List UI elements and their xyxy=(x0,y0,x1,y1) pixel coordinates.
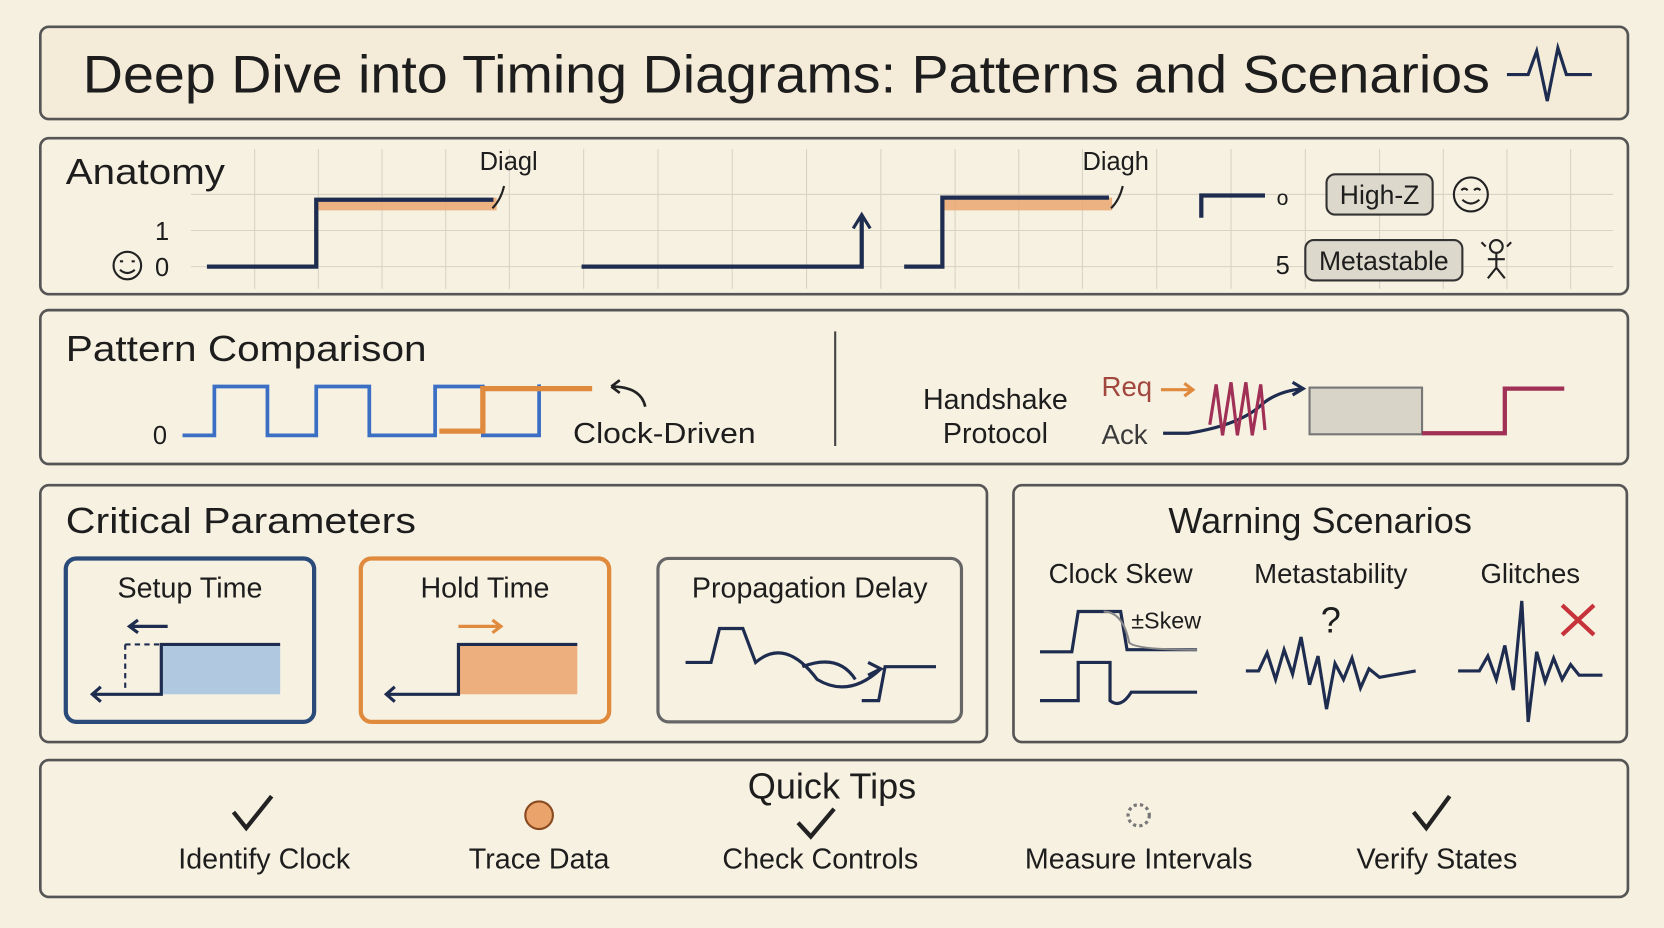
signal trace 1 xyxy=(207,186,1265,267)
clock-driven waveform xyxy=(183,380,645,435)
heading: quick tips: Quick Tips xyxy=(748,765,916,806)
panel: anatomy: 5 xyxy=(1276,252,1290,280)
card: hold time: Hold Time xyxy=(421,573,549,605)
tip: trace data xyxy=(469,801,609,875)
tip: check controls xyxy=(722,809,918,875)
panel: critical parameters xyxy=(40,485,987,742)
card: hold time xyxy=(361,558,609,722)
axis labels: 1 xyxy=(155,218,169,246)
panel: pattern comparison: Protocol xyxy=(943,418,1048,450)
heading: anatomy: Anatomy xyxy=(66,151,225,192)
card: propagation delay xyxy=(658,558,961,722)
handshake waveform xyxy=(1161,382,1564,435)
icon: red x xyxy=(1562,605,1594,635)
card: setup time: Setup Time xyxy=(118,573,262,605)
label: clock-driven: Clock-Driven xyxy=(573,418,756,450)
tip: trace data: Trace Data xyxy=(469,843,609,875)
panel: quick tips xyxy=(40,760,1628,897)
heading: pattern comparison: Pattern Comparison xyxy=(66,328,427,369)
label: req / ack: Req xyxy=(1102,371,1152,402)
panel: warning scenarios xyxy=(1013,485,1627,742)
heading: warning scenarios: Warning Scenarios xyxy=(1168,500,1472,541)
tip: check controls: Check Controls xyxy=(722,843,918,875)
panel: pattern comparison xyxy=(40,310,1628,464)
tip: identify clock xyxy=(178,796,351,875)
heading: critical parameters: Critical Parameters xyxy=(66,500,416,541)
panel: pattern comparison: 0 xyxy=(153,422,167,450)
panel: anatomy: 0 xyxy=(155,254,169,282)
icon: pulse xyxy=(1507,48,1592,101)
label: handshake protocol: Handshake xyxy=(923,384,1068,416)
title: Deep Dive into Timing Diagrams: Patterns and Scenarios xyxy=(83,46,1490,105)
tip: verify states: Verify States xyxy=(1356,843,1517,875)
panel: warning scenarios: Metastability xyxy=(1254,558,1408,589)
chart: clock skew xyxy=(1040,612,1197,703)
panel: warning scenarios: Glitches xyxy=(1480,558,1580,589)
badge: Metastable: Metastable xyxy=(1319,246,1449,276)
chart: metastability: ? xyxy=(1321,600,1341,641)
card: setup time xyxy=(66,558,314,722)
tip: measure intervals: Measure Intervals xyxy=(1025,843,1253,875)
label: Diagl: Diagl xyxy=(480,148,538,176)
title xyxy=(40,27,1628,119)
label: Diagh: Diagh xyxy=(1082,148,1149,176)
chart: glitches xyxy=(1458,601,1602,722)
panel: anatomy: o xyxy=(1277,187,1288,210)
panel: anatomy xyxy=(40,138,1628,294)
icon: shaky figure xyxy=(1481,240,1511,278)
panel: pattern comparison: Ack xyxy=(1102,419,1148,450)
badge: High-Z: High-Z xyxy=(1340,180,1419,210)
panel: warning scenarios: ±Skew xyxy=(1131,607,1201,633)
icon: smiley xyxy=(1454,177,1488,211)
card: propagation delay: Propagation Delay xyxy=(692,573,928,605)
tip: identify clock: Identify Clock xyxy=(178,843,351,875)
badge: Metastable xyxy=(1305,240,1462,280)
icon: smiley xyxy=(114,252,141,279)
panel: warning scenarios: Clock Skew xyxy=(1049,558,1193,589)
badge: High-Z xyxy=(1327,174,1433,215)
tip: verify states xyxy=(1356,796,1517,875)
tip: measure intervals xyxy=(1025,805,1253,875)
